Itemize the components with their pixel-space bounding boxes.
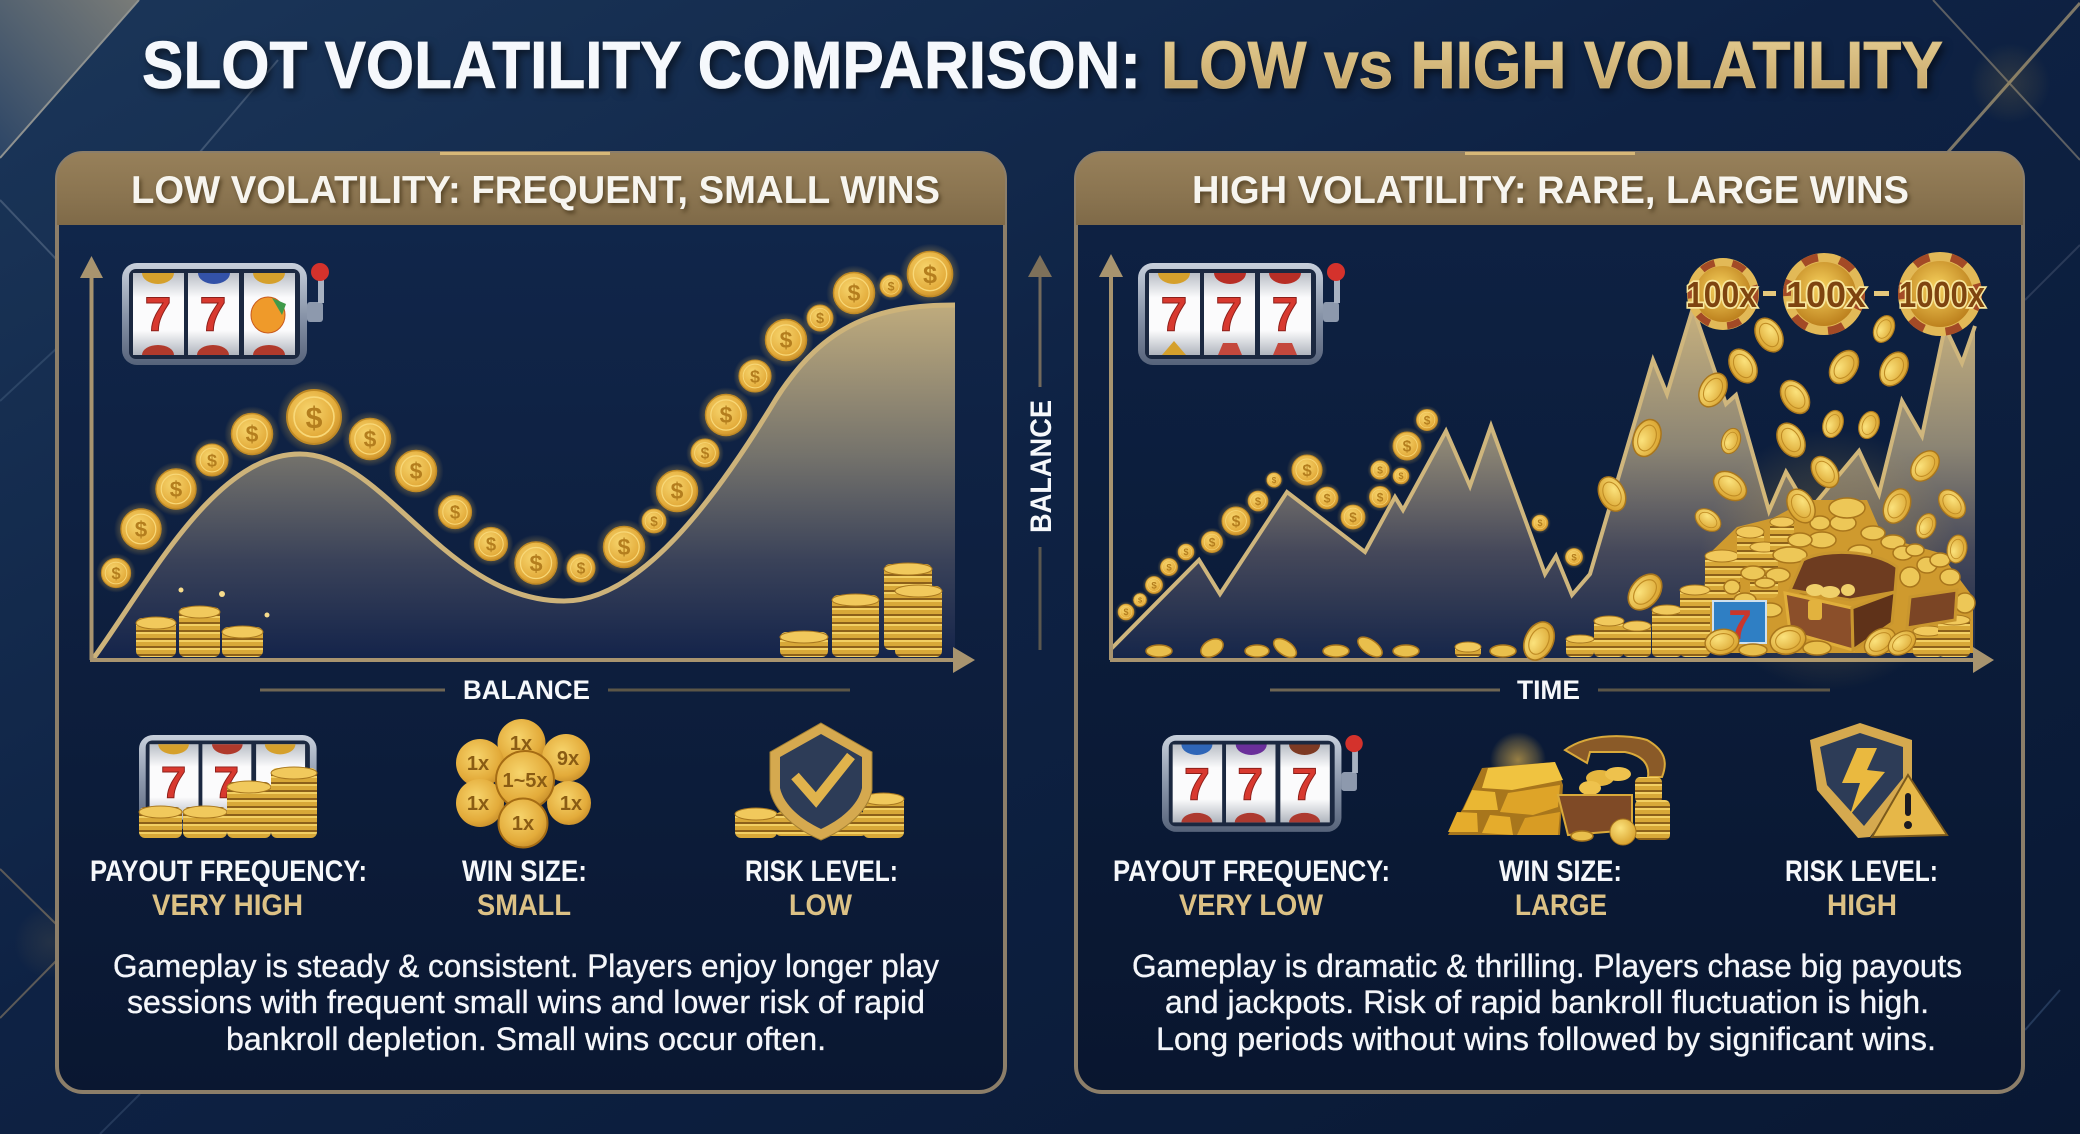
coin trail: early small wins bbox=[1115, 406, 1586, 623]
falling coins bbox=[1593, 312, 1971, 616]
icon: slot machine bbox=[1162, 735, 1363, 832]
center axis: balance bbox=[1025, 255, 1058, 650]
center axis: balance: BALANCE bbox=[1025, 400, 1058, 533]
stat: risk level: HIGH bbox=[1827, 889, 1897, 922]
icon: shield with check bbox=[735, 723, 904, 840]
stat: payout frequency: VERY LOW bbox=[1179, 889, 1324, 922]
icon: slot machine: 7 bbox=[1184, 758, 1210, 809]
description: low volatility bbox=[113, 948, 939, 1057]
coin trail: frequent small wins bbox=[96, 244, 960, 593]
icon: treasure chest large bbox=[1785, 552, 1957, 650]
panel: low volatility bbox=[57, 152, 1005, 1092]
icon: coin cluster: 9x bbox=[557, 748, 579, 770]
description: high volatility bbox=[1132, 948, 1962, 1057]
stat: payout frequency bbox=[90, 735, 367, 922]
stat: risk level bbox=[735, 723, 904, 922]
treasure pile bbox=[1566, 430, 1975, 690]
multiplier chips: 1000x bbox=[1899, 274, 1985, 315]
stat: payout frequency: PAYOUT FREQUENCY: bbox=[90, 855, 367, 888]
axis label: time: TIME bbox=[1517, 675, 1580, 705]
axes bbox=[1099, 254, 1994, 673]
icon: slot machine with coin stacks bbox=[139, 735, 317, 838]
icon: coin cluster: 1x bbox=[467, 753, 489, 775]
chart: low volatility balance curve bbox=[80, 256, 975, 673]
title bbox=[142, 28, 1943, 103]
description: low volatility: sessions with frequent small wins and lower risk of rapid bbox=[127, 984, 925, 1020]
icon: slot machine with fruit: 7 bbox=[200, 289, 226, 342]
icon: slot machine 777: 7 bbox=[1216, 289, 1242, 342]
panel header: high volatility bbox=[1076, 152, 2023, 225]
icon: slot machine with fruit: 7 bbox=[145, 289, 171, 342]
pile stacks bbox=[1705, 517, 1794, 602]
icon: slot machine: 7 bbox=[1237, 758, 1263, 809]
stat: win size bbox=[1448, 732, 1670, 922]
icon: coin cluster: 1~5x bbox=[502, 770, 548, 792]
stat: win size: SMALL bbox=[477, 889, 571, 922]
stat: win size bbox=[456, 719, 591, 922]
icon: slot machine with fruit bbox=[122, 263, 329, 365]
title: LOW vs HIGH VOLATILITY bbox=[1161, 28, 1943, 103]
description: high volatility: Long periods without wins followed by significant wins. bbox=[1156, 1021, 1936, 1057]
description: high volatility: Gameplay is dramatic & thrilling. Players chase big payouts bbox=[1132, 948, 1962, 984]
panel: high volatility bbox=[1076, 152, 2023, 1092]
icon: shield with bolt and warning bbox=[1810, 723, 1947, 838]
icon: slot machine: 7 bbox=[1292, 758, 1318, 809]
multiplier chips bbox=[1686, 252, 1985, 336]
multiplier chips: 100x bbox=[1786, 274, 1866, 315]
ground coins bbox=[1146, 617, 1560, 665]
axes bbox=[80, 256, 975, 673]
axis label: balance: BALANCE bbox=[463, 675, 590, 705]
coin stacks rising bbox=[1566, 585, 1970, 657]
icon: coin cluster: 1x bbox=[467, 793, 489, 815]
card: lucky seven bbox=[1713, 601, 1766, 648]
icon: coin cluster: 1x bbox=[512, 813, 534, 835]
stat: risk level: RISK LEVEL: bbox=[745, 855, 898, 888]
stat: risk level: RISK LEVEL: bbox=[1785, 855, 1938, 888]
icon: coin cluster: 1x bbox=[510, 733, 532, 755]
chart: high volatility balance line bbox=[1099, 254, 1994, 673]
stat: win size: WIN SIZE: bbox=[462, 855, 587, 888]
coin stacks: growing wins bbox=[780, 563, 942, 657]
description: low volatility: bankroll depletion. Small wins occur often. bbox=[226, 1021, 826, 1057]
icon: coin cluster bbox=[456, 719, 591, 848]
panel header: high volatility: HIGH VOLATILITY: RARE, LARGE WINS bbox=[1192, 169, 1909, 212]
icon: slot machine with coin stacks: 7 bbox=[214, 757, 239, 807]
foreground coins bbox=[1703, 622, 1920, 661]
icon: slot machine 777: 7 bbox=[1161, 289, 1187, 342]
icon: slot machine 777: 7 bbox=[1272, 289, 1298, 342]
card: lucky seven: 7 bbox=[1728, 601, 1752, 648]
title: SLOT VOLATILITY COMPARISON: bbox=[142, 28, 1141, 103]
icon: coin cluster: 1x bbox=[560, 793, 582, 815]
stat: risk level: LOW bbox=[789, 889, 853, 922]
multiplier chips: 100x bbox=[1686, 274, 1757, 315]
panel header: low volatility: LOW VOLATILITY: FREQUENT, SMALL WINS bbox=[131, 169, 940, 212]
stat: risk level bbox=[1785, 723, 1947, 922]
icon: slot machine 777 bbox=[1138, 263, 1345, 365]
stat: payout frequency: VERY HIGH bbox=[152, 889, 303, 922]
coin stacks: small wins bbox=[136, 588, 270, 657]
stat: payout frequency bbox=[1113, 735, 1390, 922]
panel header: low volatility bbox=[57, 152, 1005, 225]
icon: gold bars and chest bbox=[1448, 732, 1670, 845]
description: high volatility: and jackpots. Risk of rapid bankroll fluctuation is high. bbox=[1165, 984, 1929, 1020]
icon: slot machine with coin stacks: 7 bbox=[161, 757, 186, 807]
stat: win size: WIN SIZE: bbox=[1499, 855, 1622, 888]
description: low volatility: Gameplay is steady & consistent. Players enjoy longer play bbox=[113, 948, 939, 984]
stat: payout frequency: PAYOUT FREQUENCY: bbox=[1113, 855, 1390, 888]
stat: win size: LARGE bbox=[1515, 889, 1607, 922]
